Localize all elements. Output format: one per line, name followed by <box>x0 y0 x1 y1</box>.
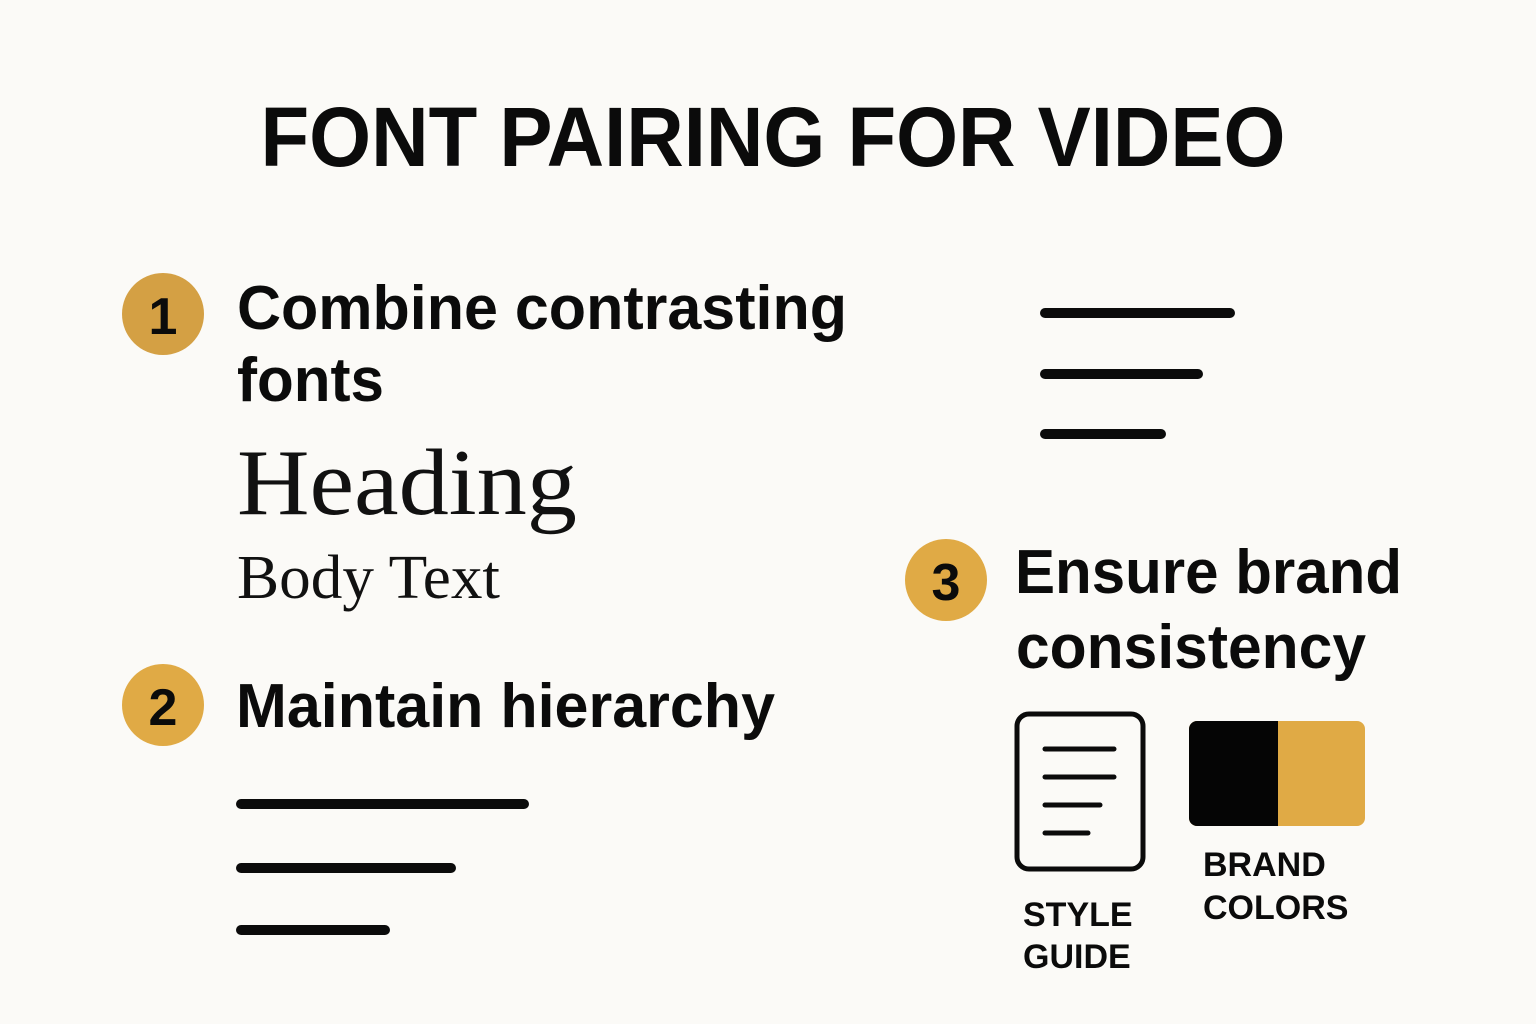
label: brand colors: COLORS <box>1203 889 1348 927</box>
sample: serif heading: Heading <box>237 431 577 535</box>
icon: number 3 badge: 3 <box>932 554 960 612</box>
panel: hierarchy lines top right <box>1045 313 1230 434</box>
label: brand colors: BRAND <box>1203 846 1326 884</box>
title: FONT PAIRING FOR VIDEO <box>260 90 1286 184</box>
panel: brand consistency <box>905 538 1402 976</box>
icon: number 2 badge <box>122 664 204 746</box>
icon: brand color swatch <box>1189 721 1365 826</box>
heading: maintain hierarchy: Maintain hierarchy <box>236 672 776 741</box>
icon: number 2 badge: 2 <box>149 679 177 737</box>
icon: number 1 badge: 1 <box>149 288 177 346</box>
icon: number 1 badge <box>122 273 204 355</box>
heading: combine contrasting fonts: fonts <box>237 346 384 415</box>
panel: combine contrasting fonts <box>122 273 847 612</box>
sample: serif body text: Body Text <box>237 544 500 612</box>
label: style guide: GUIDE <box>1023 938 1131 976</box>
heading: combine contrasting fonts: Combine contrasting <box>237 274 847 343</box>
heading: ensure brand consistency: consistency <box>1016 613 1366 682</box>
icon: style guide document <box>1017 714 1143 869</box>
heading: ensure brand consistency: Ensure brand <box>1015 538 1402 607</box>
panel: maintain hierarchy <box>122 664 776 930</box>
label: style guide: STYLE <box>1023 896 1133 934</box>
hierarchy lines <box>241 804 524 930</box>
icon: number 3 badge <box>905 539 987 621</box>
